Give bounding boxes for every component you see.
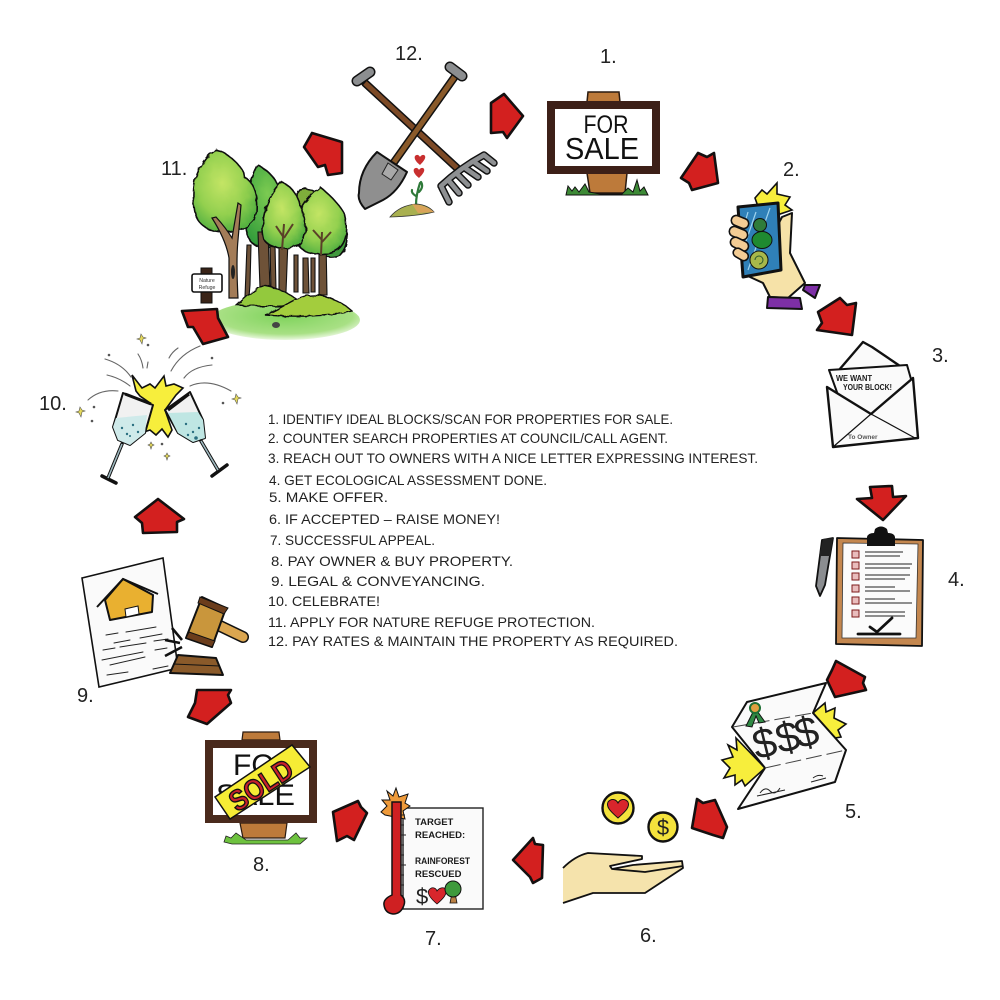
number 6: 6. (640, 925, 657, 947)
step 7: fundraising thermometer (381, 788, 483, 950)
poster text: TARGET (415, 817, 454, 828)
grass (224, 833, 307, 844)
arrow: 6 to 7 (513, 838, 543, 883)
phone (738, 203, 781, 277)
swoosh lines (88, 346, 231, 400)
heart (607, 799, 629, 818)
tree hollow (231, 265, 235, 279)
step 11 text: 11. APPLY FOR NATURE REFUGE PROTECTION. (268, 614, 595, 630)
letter text: WE WANT (836, 374, 872, 383)
step 12: shovel and rake (357, 43, 494, 217)
step 2 text: 2. COUNTER SEARCH PROPERTIES AT COUNCIL/CALL AGENT. (268, 430, 668, 446)
step 8: sold sign: SALE (216, 779, 295, 812)
blade socket (382, 163, 398, 180)
document lines (102, 627, 168, 675)
signatures (757, 775, 826, 796)
step 1: for sale sign (551, 46, 656, 195)
step 1: for sale sign: SALE (565, 131, 639, 166)
envelope flap (839, 342, 900, 370)
dollar glyph: $ (657, 815, 669, 840)
arrow: 7 to 8 (333, 801, 367, 841)
number 12: 12. (395, 43, 423, 65)
seedling (412, 182, 422, 205)
thermometer ticks (401, 815, 406, 885)
toast burst (132, 375, 183, 437)
thermometer burst (381, 788, 410, 819)
step 7: fundraising thermometer: RESCUED (415, 869, 462, 880)
app icons (754, 218, 766, 232)
poster (403, 808, 483, 909)
gavel base (170, 655, 223, 675)
step 11: nature refuge forest: Refuge (199, 285, 215, 291)
sign text: FOR (584, 111, 628, 139)
open hand (563, 853, 683, 903)
step 5 text: 5. MAKE OFFER. (269, 489, 388, 505)
step 5: offer document: $ (789, 706, 824, 758)
arrow: 8 to 9 (188, 690, 231, 724)
arrow: 3 to 4 (857, 486, 906, 520)
shovel grip (450, 67, 462, 76)
main trunk (212, 203, 241, 298)
hand outline (563, 853, 683, 903)
left glass stem (102, 444, 122, 483)
number 3: 3. (932, 345, 949, 367)
arrow: 9 to 10 (135, 499, 184, 533)
hearts (415, 155, 425, 165)
sign board (209, 744, 313, 819)
step 7: fundraising thermometer: RAINFOREST (415, 856, 470, 867)
number 2: 2. (783, 159, 800, 181)
step 10 text: 10. CELEBRATE! (268, 593, 380, 609)
front tree crowns (193, 150, 347, 254)
step 3 text: 3. REACH OUT TO OWNERS WITH A NICE LETTER EXPRESSING INTEREST. (268, 450, 758, 466)
step 3: envelope with letter (827, 342, 949, 447)
step 8: sold sign (209, 732, 313, 876)
number 11: 11. (161, 158, 187, 180)
grass ground (210, 300, 360, 340)
clip (867, 526, 895, 546)
step 1 text: 1. IDENTIFY IDEAL BLOCKS/SCAN FOR PROPERTIES FOR SALE. (268, 411, 673, 427)
left glass (113, 393, 153, 445)
refuge sign post (201, 268, 212, 303)
left burst (722, 738, 765, 786)
step list text block (268, 411, 758, 649)
envelope fold lines (833, 414, 915, 447)
paper (842, 543, 918, 638)
heart coin (602, 792, 634, 824)
arrow: 4 to 5 (827, 661, 866, 697)
fingers (728, 214, 750, 262)
rake handle (365, 83, 457, 168)
step 6 text: 6. IF ACCEPTED – RAISE MONEY! (269, 511, 500, 527)
gavel head (186, 597, 226, 647)
number 4: 4. (948, 569, 965, 591)
step 4 text: 4. GET ECOLOGICAL ASSESSMENT DONE. (269, 472, 547, 488)
refuge sign text: Nature (199, 278, 215, 284)
step 9 text: 9. LEGAL & CONVEYANCING. (271, 573, 485, 589)
number 1: 1. (600, 46, 617, 68)
screen glare (740, 208, 770, 270)
big check (858, 618, 900, 634)
addressee: To Owner (848, 434, 878, 441)
refuge sign (192, 274, 222, 292)
house icon (105, 579, 153, 620)
document (82, 558, 178, 687)
arrow: 5 to 6 (692, 799, 727, 838)
shovel blade (359, 152, 407, 209)
envelope body (827, 378, 918, 447)
rake grip (357, 72, 370, 81)
arrow: 10 to 11 (182, 309, 228, 344)
step 10: champagne glasses (39, 334, 241, 483)
fold lines (733, 713, 846, 768)
dollar signs: $ (747, 717, 782, 769)
letter (829, 365, 913, 420)
right burst (813, 703, 846, 746)
step 7: fundraising thermometer: REACHED: (415, 830, 465, 841)
ribbon seal (746, 708, 765, 727)
checklist (852, 551, 912, 617)
sold text: SOLD (223, 753, 300, 818)
sign post (587, 92, 627, 193)
rake head (441, 155, 494, 202)
sign text: FOR (233, 749, 296, 782)
gavel handle (218, 625, 243, 637)
number 10: 10. (39, 393, 67, 415)
bubbles (121, 423, 200, 440)
sparkles (91, 344, 224, 445)
grass (566, 180, 648, 195)
trunks (245, 232, 327, 297)
sleeve (767, 297, 802, 309)
step 5: offer document: $ (770, 711, 805, 763)
phone glow burst (755, 183, 792, 214)
number 7: 7. (425, 928, 442, 950)
arrow: 11 to 12 (304, 133, 342, 175)
step 6: hand with coins (563, 792, 683, 947)
number 5: 5. (845, 801, 862, 823)
sold banner (215, 745, 310, 819)
step 5: offer document (722, 683, 862, 823)
step 12 text: 12. PAY RATES & MAINTAIN THE PROPERTY AS REQUIRED. (268, 633, 678, 649)
step 4: clipboard checklist (816, 526, 965, 646)
moss mounds (237, 286, 352, 316)
step 2: phone in hand (728, 159, 820, 309)
document (732, 683, 846, 809)
hand (750, 213, 805, 298)
soil mound (390, 204, 434, 217)
pebbles (272, 322, 280, 328)
number 9: 9. (77, 685, 94, 707)
back tree crowns (245, 165, 347, 257)
cycle arrows (135, 94, 906, 883)
sign board (551, 105, 656, 170)
number 8: 8. (253, 854, 270, 876)
step 9: legal document and gavel (77, 558, 243, 707)
dollar heart tree: $ (416, 884, 428, 909)
shovel handle (392, 75, 456, 165)
gavel sound marks (165, 628, 182, 656)
post (240, 732, 287, 838)
pen (816, 538, 833, 596)
board (836, 538, 923, 646)
dollar coin (648, 812, 678, 842)
right glass (165, 392, 205, 442)
crown branches (276, 224, 331, 255)
arrow: 12 to 1 (491, 94, 523, 138)
arrow: 1 to 2 (681, 153, 718, 190)
right glass stem (201, 441, 227, 476)
thermometer (384, 802, 405, 914)
arrow: 2 to 3 (817, 298, 856, 335)
step 8 text: 8. PAY OWNER & BUY PROPERTY. (271, 553, 513, 569)
step 7 text: 7. SUCCESSFUL APPEAL. (270, 532, 435, 548)
step 3: envelope with letter: YOUR BLOCK! (843, 383, 892, 392)
step 11: nature refuge forest (161, 150, 360, 340)
